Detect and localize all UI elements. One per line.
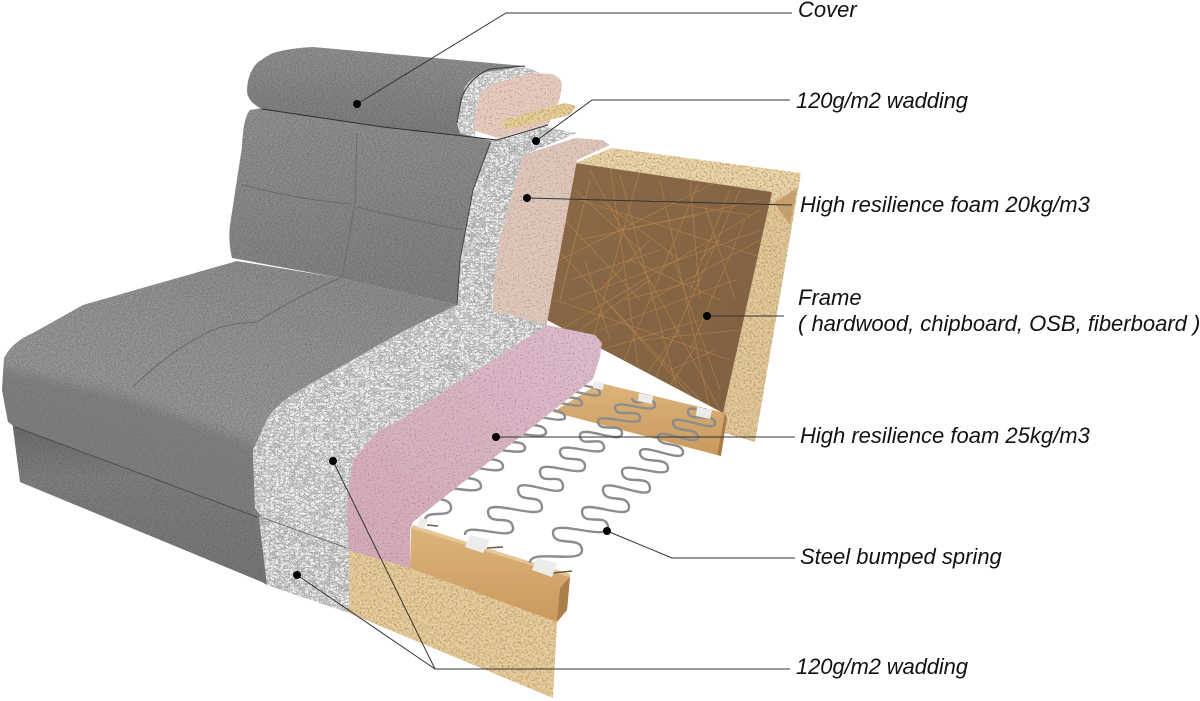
seat wadding <box>253 305 547 552</box>
lower base cover <box>12 420 267 585</box>
middle spring <box>465 398 655 535</box>
label: top wadding: 120g/m2 wadding <box>796 88 969 113</box>
frame fibreboard face <box>547 163 772 413</box>
chipboard base <box>349 545 557 698</box>
headrest wadding <box>457 67 540 137</box>
label: foam 25: High resilience foam 25kg/m3 <box>800 423 1091 448</box>
sofa cutaway illustration <box>0 13 801 698</box>
label: spring: Steel bumped spring <box>800 544 1003 569</box>
label: frame: Frame <box>798 285 862 310</box>
front beam <box>410 525 570 622</box>
frame board <box>547 148 801 442</box>
headrest foam <box>473 73 562 138</box>
headrest board <box>503 103 576 130</box>
headrest cover <box>247 47 525 136</box>
leader: top wadding <box>532 100 790 145</box>
pink seat foam <box>347 325 602 568</box>
backrest cover <box>229 108 492 305</box>
frame side edge <box>723 173 801 442</box>
leader: cover <box>353 13 792 108</box>
label: foam 20: High resilience foam 20kg/m3 <box>800 192 1091 217</box>
backrest foam <box>493 138 610 330</box>
leader: bottom wadding <box>293 457 790 669</box>
frame notch <box>774 188 797 225</box>
label: frame materials: ( hardwood, chipboard, OSB, fiberboard ) <box>798 311 1200 336</box>
leader: frame <box>703 312 784 320</box>
front spring <box>530 408 715 563</box>
leader: foam 25 <box>492 433 795 441</box>
leader: foam 20 <box>523 194 792 205</box>
frame fibres <box>548 165 770 410</box>
labels <box>796 0 1200 679</box>
backrest <box>229 108 610 330</box>
label: bottom wadding: 120g/m2 wadding <box>796 654 969 679</box>
seat front face shading <box>0 365 258 530</box>
headrest <box>247 47 576 140</box>
frame top edge <box>575 148 801 202</box>
seat cover <box>0 261 457 530</box>
seat seams <box>133 278 340 387</box>
backrest wadding <box>457 127 577 316</box>
rear spring <box>420 380 600 521</box>
spring clips <box>417 381 712 577</box>
backrest seams <box>243 133 463 277</box>
base wadding <box>258 510 350 613</box>
leader lines and markers <box>293 13 795 669</box>
back beam <box>553 383 727 456</box>
leader: spring <box>603 527 795 558</box>
